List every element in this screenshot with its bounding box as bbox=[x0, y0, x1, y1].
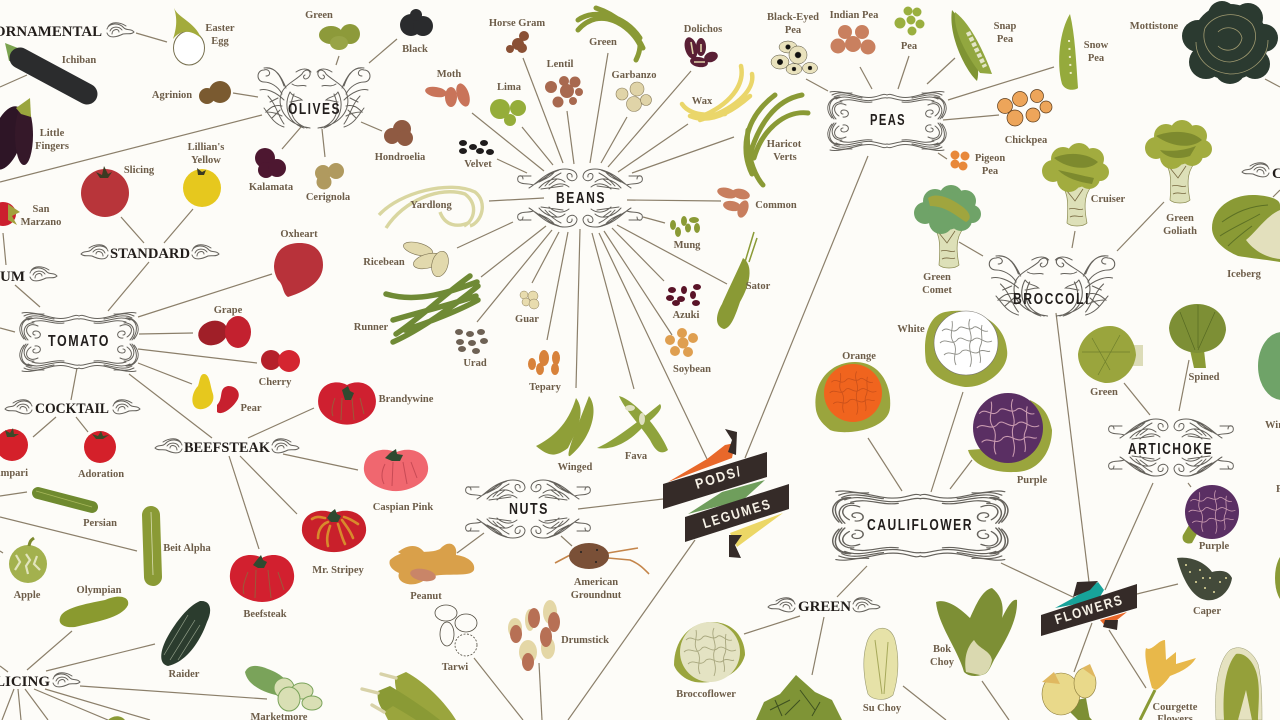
heading: Tomato: TOMATO bbox=[48, 333, 110, 350]
item: Caspian Pink tomato: Caspian Pink bbox=[373, 502, 433, 513]
item: Cerignola olives: Cerignola bbox=[306, 192, 351, 203]
heading: Beans: BEANS bbox=[556, 190, 606, 207]
item: Persian cucumber bbox=[36, 491, 117, 529]
heading: Broccoli: BROCCOLI bbox=[1013, 291, 1090, 308]
item: White cauliflower bbox=[897, 311, 1007, 387]
item: Green artichoke variety: Green bbox=[1090, 387, 1118, 398]
item: Lillian's Yellow tomato: Lillian's bbox=[188, 142, 224, 153]
item: Guar bean bbox=[515, 291, 539, 325]
item: Urad bean bbox=[455, 329, 488, 369]
item: Mottistone lettuce bbox=[1130, 1, 1278, 84]
heading: Cauliflower: CAULIFLOWER bbox=[867, 517, 973, 534]
ribbon: Pods / Legumes: LEGUMES bbox=[701, 495, 773, 531]
item: Courgette flower buds bbox=[1042, 664, 1096, 720]
item: Green artichoke variety bbox=[1078, 326, 1143, 398]
item: Sator bean: Sator bbox=[746, 281, 771, 292]
item: American Groundnut bbox=[555, 543, 649, 601]
item: Soybean bbox=[665, 328, 711, 375]
item: Haricot Verts bbox=[746, 95, 808, 185]
item: Courgette flower bbox=[1140, 640, 1198, 720]
item: Mottistone lettuce: Mottistone bbox=[1130, 21, 1179, 32]
item: Fava bean: Fava bbox=[625, 451, 648, 462]
item: Lima bean bbox=[490, 82, 526, 126]
item: Snap Pea: Pea bbox=[997, 34, 1014, 45]
heading: Green cauliflower group bbox=[768, 598, 880, 615]
item: Kalamata olives: Kalamata bbox=[249, 182, 294, 193]
item: Pear tomatoes bbox=[192, 374, 262, 414]
ribbon: Pods / Legumes: PODS/ bbox=[693, 463, 744, 492]
item: Apple cucumber: Apple bbox=[14, 590, 41, 601]
item: Apple cucumber bbox=[9, 538, 47, 601]
item: Azuki bean bbox=[666, 284, 701, 321]
item: Runner bean: Runner bbox=[354, 322, 389, 333]
item: Orange cauliflower: Orange bbox=[842, 351, 876, 362]
item: Mung bean bbox=[670, 216, 701, 251]
item: San Marzano: San bbox=[33, 204, 50, 215]
item: Adoration tomato: Adoration bbox=[78, 469, 124, 480]
item: Lima bean: Lima bbox=[497, 82, 522, 93]
item: Broccoflower bbox=[674, 622, 745, 700]
heading: Beefsteak: BEEFSTEAK bbox=[184, 440, 270, 456]
item: Indian Pea bbox=[830, 10, 879, 54]
item: Runner bean bbox=[354, 276, 478, 342]
item: Oxheart tomato bbox=[274, 229, 323, 297]
item: Brandywine tomato: Brandywine bbox=[379, 394, 434, 405]
item: Garbanzo: Garbanzo bbox=[612, 70, 656, 81]
item: Velvet bean bbox=[459, 140, 494, 170]
item: Urad bean: Urad bbox=[463, 358, 487, 369]
item: Pear tomatoes: Pear bbox=[240, 403, 262, 414]
item: Pigeon Pea bbox=[950, 150, 1005, 177]
item: black olives bbox=[400, 9, 433, 55]
item: Pea bbox=[894, 6, 924, 52]
item: Beefsteak tomato: Beefsteak bbox=[243, 609, 287, 620]
item: Mr. Stripey tomato bbox=[302, 509, 366, 576]
item: Su Choy: Su Choy bbox=[863, 703, 902, 714]
item: Common bean: Common bbox=[755, 200, 797, 211]
item: Winged bean: Winged bbox=[558, 462, 593, 473]
item: Indian Pea: Indian Pea bbox=[830, 10, 879, 21]
item: Little Fingers: Fingers bbox=[35, 141, 69, 152]
item: Caper bbox=[1177, 558, 1232, 617]
heading: Artichoke: ARTICHOKE bbox=[1128, 441, 1213, 458]
heading: Slicing bbox=[0, 673, 80, 690]
item: Persian cucumber: Persian bbox=[83, 518, 117, 529]
heading: Olives: OLIVES bbox=[288, 101, 341, 118]
item: partial pickle at bottom bbox=[108, 716, 125, 720]
item: Olympian cucumber bbox=[60, 585, 128, 627]
item: Fava bean bbox=[597, 396, 668, 462]
heading: Nuts bbox=[466, 480, 590, 538]
ribbon: Flowers bbox=[1041, 581, 1137, 636]
item: Cruiser broccoli bbox=[1042, 143, 1126, 226]
heading: partial lettuce group bbox=[1242, 163, 1280, 182]
item: green olives: Green bbox=[305, 10, 333, 21]
item: Guar bean: Guar bbox=[515, 314, 539, 325]
item: Slicing tomato bbox=[81, 165, 155, 217]
item: Green bean: Green bbox=[589, 37, 617, 48]
item: Broccoflower: Broccoflower bbox=[676, 689, 736, 700]
item: Cruiser broccoli: Cruiser bbox=[1091, 194, 1126, 205]
item: Su Choy bbox=[863, 628, 902, 714]
item: Oxheart tomato: Oxheart bbox=[280, 229, 318, 240]
item: Drumstick bbox=[508, 600, 609, 671]
item: Spined artichoke bbox=[1169, 304, 1226, 383]
item: Lillian's Yellow tomato bbox=[183, 142, 224, 207]
item: Adoration tomato bbox=[78, 431, 124, 480]
item: White cauliflower: White bbox=[897, 324, 925, 335]
item: Raider cucumber bbox=[161, 601, 210, 680]
item: Cherry tomatoes bbox=[259, 350, 300, 388]
item: Easter Egg: Easter bbox=[205, 23, 235, 34]
heading: Cauliflower bbox=[833, 491, 1008, 560]
item: Ricebean: Ricebean bbox=[363, 257, 405, 268]
item: Little Fingers bbox=[0, 98, 69, 174]
item: Wax bean: Wax bbox=[692, 96, 713, 107]
heading: Cocktail bbox=[5, 400, 140, 417]
item: Moth bean: Moth bbox=[437, 69, 461, 80]
item: Green Comet broccoli: Comet bbox=[922, 285, 952, 296]
heading: Beans bbox=[518, 169, 642, 227]
item: Green Goliath broccoli: Green bbox=[1166, 213, 1194, 224]
item: Snap Pea bbox=[951, 10, 1017, 81]
item: Purple cauliflower bbox=[968, 393, 1052, 486]
item: Bok Choy: Bok bbox=[933, 644, 951, 655]
item: Tepary bean: Tepary bbox=[529, 382, 562, 393]
item: black olives: Black bbox=[402, 44, 428, 55]
item: Bok Choy: Choy bbox=[930, 657, 955, 668]
item: Drumstick: Drumstick bbox=[561, 635, 609, 646]
item: Green bean bbox=[578, 8, 643, 60]
item: Green Goliath broccoli: Goliath bbox=[1163, 226, 1197, 237]
item: Spined artichoke: Spined bbox=[1189, 372, 1220, 383]
item: Cherry tomatoes: Cherry bbox=[259, 377, 292, 388]
item: Green Comet broccoli: Green bbox=[923, 272, 951, 283]
heading: Cocktail: COCKTAIL bbox=[35, 401, 109, 417]
heading: Beefsteak bbox=[155, 439, 299, 456]
item: Common bean bbox=[716, 186, 797, 219]
item: Beefsteak tomato bbox=[230, 555, 294, 620]
item: Black-Eyed Pea: Black-Eyed bbox=[767, 12, 819, 23]
item: Moth bean bbox=[424, 69, 472, 108]
item: American Groundnut: Groundnut bbox=[571, 590, 622, 601]
item: Raider cucumber: Raider bbox=[169, 669, 200, 680]
item: Winged bean bbox=[536, 396, 594, 473]
item: Orange cauliflower bbox=[815, 351, 890, 432]
item: Purple cauliflower: Purple bbox=[1017, 475, 1047, 486]
item: Hondroelia olives: Hondroelia bbox=[375, 152, 426, 163]
item: Green Goliath broccoli bbox=[1145, 120, 1212, 237]
item: Tarwi: Tarwi bbox=[442, 662, 468, 673]
item: Black-Eyed Pea: Pea bbox=[785, 25, 802, 36]
item: Velvet bean: Velvet bbox=[464, 159, 492, 170]
item: Chickpea: Chickpea bbox=[1005, 135, 1048, 146]
item: Little Fingers: Little bbox=[40, 128, 65, 139]
item: Horse Gram bean: Horse Gram bbox=[489, 18, 545, 29]
item: Dolichos: Dolichos bbox=[684, 24, 722, 35]
item: Agrinion olives bbox=[152, 81, 231, 104]
item: Sator bean bbox=[717, 232, 771, 329]
heading: Nuts: NUTS bbox=[509, 501, 549, 518]
heading: Peas bbox=[828, 91, 946, 151]
item: Yardlong bean: Yardlong bbox=[410, 200, 452, 211]
item: Beit Alpha cucumber: Beit Alpha bbox=[163, 543, 212, 554]
item: Lillian's Yellow tomato: Yellow bbox=[191, 155, 221, 166]
heading: Standard bbox=[81, 245, 219, 262]
item: Snow Pea: Snow bbox=[1084, 40, 1109, 51]
item: Peanut bbox=[389, 544, 474, 602]
item: Lentil: Lentil bbox=[547, 59, 573, 70]
item: partial lettuce right edge bbox=[1258, 332, 1280, 495]
item: Lentil bbox=[545, 59, 583, 108]
heading: Olives bbox=[258, 68, 370, 128]
item: Marketmore cucumber bbox=[245, 666, 322, 720]
item: Campari tomato bbox=[0, 428, 28, 479]
item: Beit Alpha cucumber bbox=[151, 512, 212, 577]
item: Horse Gram bean bbox=[489, 18, 545, 53]
item: Bok Choy bbox=[930, 588, 1017, 676]
item: Brandywine tomato bbox=[318, 382, 434, 425]
item: Tarwi bbox=[435, 605, 477, 673]
item: Slicing tomato: Slicing bbox=[124, 165, 155, 176]
item: Mr. Stripey tomato: Mr. Stripey bbox=[312, 565, 365, 576]
item: Peanut: Peanut bbox=[410, 591, 442, 602]
item: Kalamata olives bbox=[249, 148, 294, 193]
heading: Green cauliflower group: GREEN bbox=[798, 599, 851, 615]
item: San Marzano: Marzano bbox=[21, 217, 61, 228]
item: Hondroelia olives bbox=[375, 120, 426, 163]
item: Purple artichoke: Purple bbox=[1199, 541, 1229, 552]
item: Grape tomatoes: Grape bbox=[214, 305, 243, 316]
item: Caspian Pink tomato bbox=[364, 449, 433, 513]
item: Haricot Verts: Verts bbox=[773, 152, 797, 163]
item: Olympian cucumber: Olympian bbox=[77, 585, 122, 596]
item: Easter Egg bbox=[173, 8, 235, 65]
item: Grape tomatoes bbox=[195, 305, 251, 349]
item: right edge caper fruit bbox=[1275, 553, 1280, 603]
item: green olives bbox=[305, 10, 360, 50]
item: okra pods bbox=[362, 672, 456, 720]
item: Ichiban: Ichiban bbox=[62, 55, 96, 66]
heading: Broccoli bbox=[989, 256, 1115, 316]
item: Wax bean bbox=[682, 66, 752, 120]
item: Haricot Verts: Haricot bbox=[767, 139, 802, 150]
item: Iceberg lettuce bbox=[1212, 195, 1280, 280]
item: Pigeon Pea: Pea bbox=[982, 166, 999, 177]
item: Courgette flower: Courgette bbox=[1153, 702, 1198, 713]
item: Soybean: Soybean bbox=[673, 364, 711, 375]
heading: Plum bbox=[0, 267, 57, 285]
heading: Peas: PEAS bbox=[870, 112, 906, 129]
item: Mung bean: Mung bbox=[674, 240, 701, 251]
heading: Standard: STANDARD bbox=[110, 246, 190, 262]
heading: Tomato bbox=[20, 312, 138, 372]
item: Cerignola olives bbox=[306, 163, 351, 203]
item: Pigeon Pea: Pigeon bbox=[975, 153, 1005, 164]
item: Romanesco bbox=[756, 675, 842, 720]
item: Snow Pea bbox=[1059, 14, 1109, 90]
item: Tepary bean bbox=[528, 350, 562, 393]
ribbon: Pods / Legumes bbox=[663, 429, 789, 558]
item: San Marzano bbox=[0, 202, 61, 228]
heading: Artichoke bbox=[1109, 419, 1233, 476]
item: Chickpea bbox=[998, 90, 1052, 146]
item: Pea: Pea bbox=[901, 41, 918, 52]
item: Caper: Caper bbox=[1193, 606, 1221, 617]
item: Azuki bean: Azuki bbox=[673, 310, 700, 321]
item: Snow Pea: Pea bbox=[1088, 53, 1105, 64]
item: Green Comet broccoli bbox=[914, 185, 981, 296]
item: Easter Egg: Egg bbox=[211, 36, 229, 47]
item: Snap Pea: Snap bbox=[994, 21, 1017, 32]
item: Purple artichoke bbox=[1183, 485, 1239, 552]
item: Dolichos bbox=[682, 24, 722, 68]
item: Garbanzo bbox=[612, 70, 656, 112]
item: Iceberg lettuce: Iceberg bbox=[1227, 269, 1262, 280]
item: Black-Eyed Pea bbox=[767, 12, 819, 74]
item: American Groundnut: American bbox=[574, 577, 618, 588]
item: Agrinion olives: Agrinion bbox=[152, 90, 192, 101]
item: Ichiban bbox=[5, 43, 96, 94]
item: Ricebean bbox=[363, 239, 451, 279]
item: Yardlong bean bbox=[379, 187, 482, 228]
ribbon: Flowers: FLOWERS bbox=[1053, 591, 1125, 627]
item: Napa cabbage right bbox=[1216, 648, 1262, 720]
